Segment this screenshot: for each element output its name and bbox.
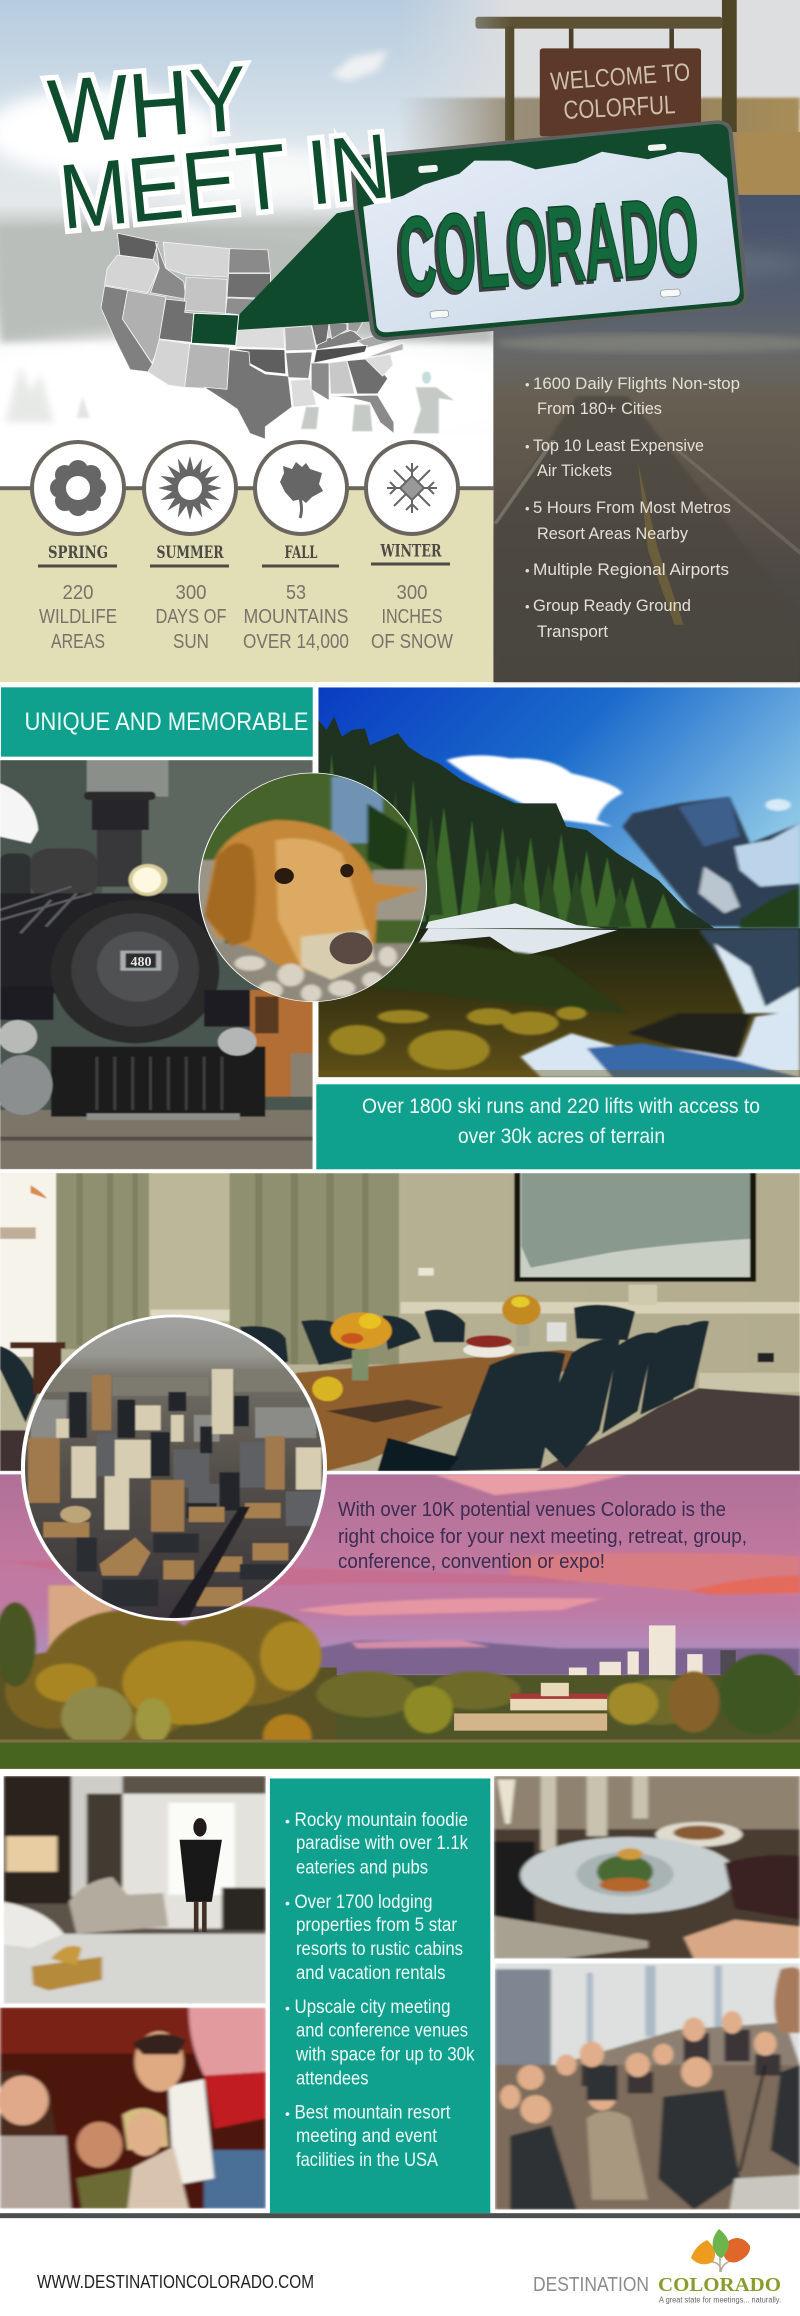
spring stat [38,543,117,653]
text: amenities bullet list: eateries and pubs [296,1858,428,1878]
footer rule [0,2213,800,2218]
logo: Destination Colorado [533,2229,781,2304]
icon: fall leaf [255,442,347,534]
access bullet list: From 180+ Cities [537,399,662,418]
text: amenities bullet list: Over 1700 lodging [294,1892,432,1913]
access bullet list: Air Tickets [537,461,612,480]
text: amenities bullet list: • [285,2106,290,2122]
divider line [0,486,493,490]
winter stat: INCHES [382,606,442,628]
text: venues callout: conference, convention or expo! [338,1551,605,1573]
photo: park at dusk [0,1474,800,1769]
photo: hotel room [4,1776,266,2004]
access bullet list: Resort Areas Nearby [537,524,688,543]
panel: dining and lodging photos [0,1776,800,2218]
photo: downtown aerial in a circle [20,1312,327,1625]
summer stat: SUN [173,631,209,653]
icon: aspen leaves [691,2229,750,2272]
text: amenities bullet list: Best mountain resort [294,2102,451,2124]
footer website: WWW.DESTINATIONCOLORADO.COM [37,2272,314,2292]
panel: venues photos [0,1173,800,1769]
text: ski runs callout: Over 1800 ski runs and 220 lifts with access to [362,1095,760,1118]
tagline: A great state for meetings... naturally. [659,2296,781,2304]
panel: unique and memorable photos [0,687,800,1169]
snowy sky photo [0,0,531,488]
winter stat: OF SNOW [371,631,453,653]
text: amenities bullet list: • [285,2000,290,2016]
text: venues callout [338,1499,747,1573]
access bullet list: • [525,563,530,578]
text: venues callout: With over 10K potential venues Colorado is the [338,1499,726,1521]
map of the United States [101,233,403,439]
sign text [549,58,691,125]
photo: plated food [494,1776,800,1959]
colorful line: COLORFUL [563,89,676,125]
fall stat: OVER 14,000 [243,631,349,653]
photo: golden retriever in a circle [194,770,434,1007]
photo: boardroom [0,1173,800,1471]
faded skiers [301,371,454,433]
text: venues callout: right choice for your next meeting, retreat, group, [338,1526,747,1548]
wordmark colorado: COLORADO [658,2274,781,2296]
Colorado state highlight [191,313,239,345]
text: amenities bullet list: and conference venues [296,2020,468,2042]
text: amenities bullet list: Rocky mountain foodie [294,1810,468,1831]
text: amenities bullet list: meeting and event [296,2126,438,2147]
access bullet list: Transport [537,622,608,641]
heading background [1,687,313,757]
meet in: MEET IN [55,115,394,249]
icon: spring flower [32,442,124,534]
spring stat: AREAS [51,631,105,653]
access bullet list: • [525,599,530,614]
locomotive number: 480 [130,955,152,970]
text: amenities bullet list: and vacation rentals [296,1963,446,1984]
access bullet list: 5 Hours From Most Metros [533,498,731,517]
road photo panel [493,195,800,682]
bullet list background [270,1778,490,2213]
title: why meet in [45,47,394,249]
winter stat: WINTER [380,542,442,562]
green pointer from Colorado to licence plate [191,207,375,345]
welcome sign photo [398,0,800,199]
spring stat: WILDLIFE [39,606,117,628]
text: amenities bullet list: with space for up to 30k [295,2044,475,2066]
text: ski runs callout: over 30k acres of terrain [458,1125,665,1148]
plate body [352,122,746,339]
beige stats panel [0,488,493,682]
access bullet list [525,374,740,641]
summer stat: DAYS OF [156,606,226,628]
access bullet list: Top 10 Least Expensive [533,436,704,455]
text: amenities bullet list: facilities in the USA [296,2150,438,2171]
icon: winter snowflake [366,442,458,534]
summer stat: SUMMER [156,543,224,563]
summer stat: 300 [176,582,206,604]
panel: hero background and map [0,0,800,682]
welcome line: WELCOME TO [549,58,691,96]
wordmark destination: DESTINATION [533,2274,649,2296]
text: amenities bullet list: properties from 5 star [296,1915,458,1936]
access bullet list: • [525,439,530,454]
fall stat: FALL [284,543,318,563]
licence plate [352,122,746,339]
fall stat: 53 [286,582,306,604]
access bullet list: 1600 Daily Flights Non-stop [533,374,740,393]
heading: unique and memorable: UNIQUE AND MEMORABLE [24,708,308,736]
text: amenities bullet list: Upscale city meeting [294,1997,450,2018]
season labels and stats [38,542,453,653]
text: amenities bullet list [285,1810,475,2171]
spring stat: SPRING [48,543,108,563]
ski text background [316,1084,800,1169]
winter stat: 300 [396,582,428,604]
text: amenities bullet list: • [285,1895,290,1911]
access bullet list: • [525,501,530,516]
access bullet list: Multiple Regional Airports [533,560,729,579]
text: amenities bullet list: paradise with over 1.1k [296,1833,468,1854]
text: ski runs callout [362,1095,760,1148]
photo: steam train [0,760,313,1169]
fall stat [243,543,349,653]
season circles [32,442,458,534]
fall stat: MOUNTAINS [244,606,348,628]
photo: group of friends [0,2008,266,2209]
access bullet list: Group Ready Ground [533,596,691,615]
text: amenities bullet list: • [285,1813,290,1829]
winter stat [371,542,453,653]
why: WHY [45,47,251,164]
summer stat [150,543,229,653]
icon: summer sun [144,442,236,534]
photo: applauding audience [495,1963,800,2210]
spring stat: 220 [62,582,94,604]
access bullet list: • [525,377,530,392]
text: amenities bullet list: attendees [296,2068,368,2090]
photo: mountain lake [318,687,800,1077]
text: amenities bullet list: resorts to rustic cabins [296,1939,463,1960]
